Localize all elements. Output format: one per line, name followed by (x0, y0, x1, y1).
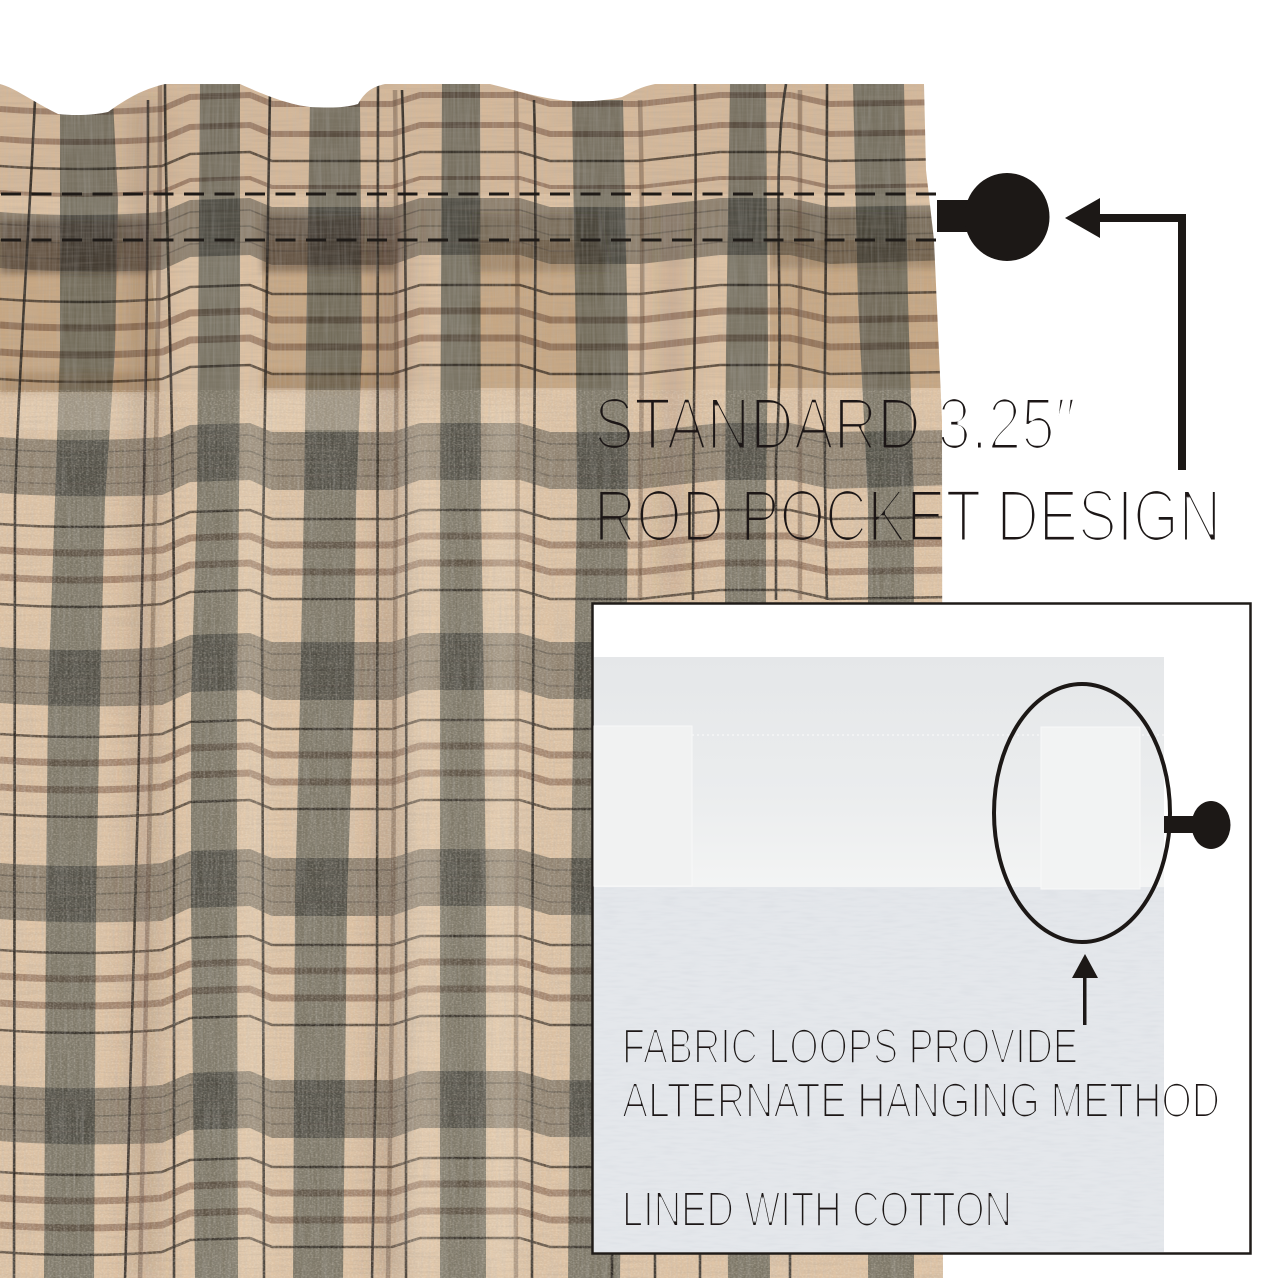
loops description text (622, 1020, 1220, 1237)
heading: rod pocket label (594, 384, 1221, 557)
upper doubled section tone (0, 240, 942, 392)
pocket band shade (0, 212, 940, 394)
inset panel: fabric loops (592, 604, 1250, 1254)
bleached lower-left patches (18, 390, 395, 430)
fold shading (130, 100, 685, 1280)
brown vertical warp stripes (140, 84, 800, 1280)
fabric weave texture (0, 84, 950, 1280)
icon: curtain rod with finial (937, 173, 1050, 261)
top of curtain thin cross lines (0, 95, 950, 195)
left fabric loop (594, 726, 692, 886)
loops description text: FABRIC LOOPS PROVIDE (622, 1020, 1078, 1074)
arrow up to loop (1072, 954, 1098, 1025)
thin vertical warp lines (14, 84, 827, 1280)
wide vertical bands (44, 84, 914, 1280)
horizontal plaid rows (0, 198, 950, 382)
right fabric loop (1041, 727, 1140, 889)
inset photo of curtain back (594, 657, 1164, 1252)
loops description text: LINED WITH COTTON (622, 1183, 1012, 1237)
callout ellipse around loop (994, 684, 1170, 942)
heading: rod pocket label: STANDARD 3.25″ (594, 384, 1076, 465)
rod pocket dashed stitching lines (1, 194, 936, 240)
stitching row (692, 734, 1164, 736)
curtain: plaid fabric panel (0, 80, 950, 1280)
arrow pointing at rod (1065, 198, 1186, 470)
icon: small rod with finial (1164, 801, 1230, 849)
